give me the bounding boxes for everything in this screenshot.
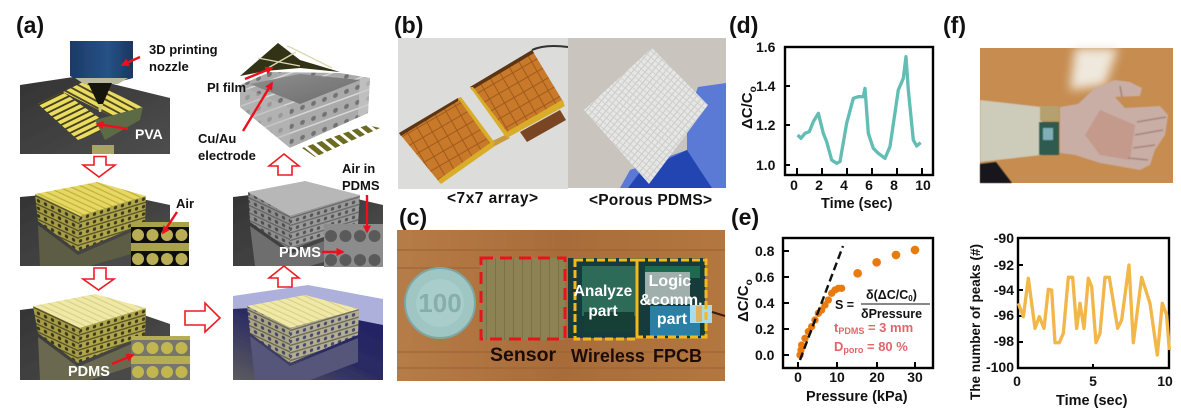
annotations: Air bbox=[176, 196, 194, 211]
panel c: wireless device bbox=[397, 204, 725, 381]
scene: assembled sensor with electrodes bbox=[240, 43, 380, 157]
x tick labels: 6 bbox=[865, 177, 873, 193]
x tick labels bbox=[790, 177, 931, 193]
annotations: PVA bbox=[135, 126, 163, 142]
y tick labels bbox=[755, 243, 775, 363]
x tick labels bbox=[794, 369, 923, 385]
thickness and porosity note: poro bbox=[843, 345, 864, 355]
scene: porous PDMS stack bbox=[233, 181, 383, 267]
x tick labels: 5 bbox=[1089, 373, 1097, 389]
scene: PDMS infiltrated scaffold bbox=[20, 294, 190, 380]
y tick labels: 1.6 bbox=[756, 39, 776, 55]
scene: stacked PVA scaffold bbox=[20, 182, 189, 266]
ticks bbox=[783, 251, 915, 368]
y axis title: o bbox=[744, 279, 755, 285]
x axis title: Time (sec) bbox=[1056, 393, 1128, 409]
y tick labels: 0.6 bbox=[755, 269, 775, 285]
label (d): (d) bbox=[729, 12, 758, 38]
label (f): (f) bbox=[943, 12, 966, 38]
sensitivity formula: S = bbox=[835, 298, 854, 312]
panel b: photographs bbox=[394, 12, 726, 209]
coin value: 100 bbox=[418, 288, 462, 318]
x tick labels: 0 bbox=[1013, 373, 1021, 389]
caption: porous PDMS: <Porous PDMS> bbox=[589, 192, 712, 209]
thickness and porosity note: PDMS bbox=[838, 326, 864, 336]
thickness and porosity note: D bbox=[834, 339, 843, 354]
panel e: pressure chart bbox=[731, 204, 933, 405]
y tick labels: 0.8 bbox=[755, 243, 775, 259]
annotations: nozzle bbox=[149, 59, 189, 74]
annotations: PI film bbox=[207, 80, 246, 95]
panel d: time response chart bbox=[729, 12, 933, 212]
annotations: electrode bbox=[198, 148, 256, 163]
ticks bbox=[1018, 265, 1093, 368]
axes frame bbox=[783, 238, 933, 368]
labels on device: FPCB bbox=[653, 346, 702, 366]
x tick labels: 8 bbox=[890, 177, 898, 193]
y tick labels bbox=[986, 230, 1014, 375]
scatter points bbox=[796, 246, 919, 359]
orange-yellow curve bbox=[1018, 265, 1169, 355]
y tick labels: 0.0 bbox=[755, 347, 775, 363]
sensitivity formula: ) bbox=[913, 288, 917, 302]
y tick labels: -90 bbox=[994, 230, 1014, 246]
ticks bbox=[785, 86, 922, 175]
y axis title: o bbox=[748, 86, 759, 92]
y tick labels: 1.0 bbox=[756, 157, 776, 173]
labels on device: Logic bbox=[649, 273, 691, 290]
labels on device bbox=[490, 273, 703, 366]
labels on device: part bbox=[657, 311, 688, 328]
labels on device: Analyze bbox=[574, 283, 633, 300]
y tick labels: 1.2 bbox=[756, 117, 776, 133]
y tick labels: -100 bbox=[986, 359, 1014, 375]
label (a): (a) bbox=[16, 12, 44, 38]
x tick labels: 30 bbox=[907, 369, 923, 385]
y axis title: ΔC/C bbox=[739, 92, 756, 129]
x tick labels: 0 bbox=[794, 369, 802, 385]
y tick labels bbox=[756, 39, 776, 173]
labels on device: part bbox=[588, 303, 618, 320]
panel f: wearable demo bbox=[943, 12, 1173, 409]
scene: PVA dissolving in blue bath bbox=[233, 285, 383, 380]
thickness and porosity note bbox=[834, 320, 913, 355]
photo: 7x7 array bbox=[398, 38, 568, 189]
x tick labels: 20 bbox=[869, 369, 885, 385]
label (c): (c) bbox=[399, 204, 427, 230]
x tick labels bbox=[1013, 373, 1173, 389]
y axis title: ΔC/C bbox=[735, 285, 752, 322]
annotations: Air in bbox=[342, 161, 375, 176]
axes frame bbox=[1018, 238, 1169, 368]
axes frame bbox=[785, 47, 933, 175]
x tick labels: 10 bbox=[915, 177, 931, 193]
red pointer arrows bbox=[97, 57, 367, 364]
y tick labels: 0.4 bbox=[755, 295, 775, 311]
annotations: PDMS bbox=[68, 364, 110, 380]
photo: porous PDMS bbox=[568, 38, 726, 188]
block arrows between steps bbox=[83, 154, 299, 332]
label (b): (b) bbox=[394, 12, 423, 38]
y tick labels: -92 bbox=[994, 257, 1014, 273]
annotations: 3D printing bbox=[149, 42, 218, 57]
sensitivity formula bbox=[835, 288, 930, 321]
y tick labels: 0.2 bbox=[755, 321, 775, 337]
sensitivity formula: δPressure bbox=[861, 307, 922, 321]
caption: 7x7 array: <7x7 array> bbox=[447, 190, 538, 207]
annotations bbox=[68, 42, 380, 380]
sensitivity formula: δ(ΔC/C bbox=[866, 288, 908, 302]
y tick labels: -96 bbox=[994, 307, 1014, 323]
x tick labels: 2 bbox=[815, 177, 823, 193]
annotations: Cu/Au bbox=[198, 131, 236, 146]
x tick labels: 10 bbox=[1157, 373, 1173, 389]
y axis title: The number of peaks (#) bbox=[968, 244, 983, 400]
photo: wrist sensor bbox=[980, 48, 1173, 183]
x axis title: Pressure (kPa) bbox=[806, 389, 908, 405]
y tick labels: -98 bbox=[994, 333, 1014, 349]
labels on device: &comm. bbox=[639, 292, 703, 309]
annotations: PDMS bbox=[279, 245, 321, 261]
x tick labels: 0 bbox=[790, 177, 798, 193]
thickness and porosity note: = 3 mm bbox=[864, 320, 913, 335]
panel a: fabrication process bbox=[16, 12, 383, 380]
annotations: PDMS bbox=[342, 178, 380, 193]
photo: device on wood bbox=[397, 230, 725, 381]
label (e): (e) bbox=[731, 204, 759, 230]
teal curve bbox=[798, 57, 921, 163]
y tick labels: 1.4 bbox=[756, 78, 776, 94]
sensitivity formula: 0 bbox=[908, 294, 913, 303]
y tick labels: -94 bbox=[994, 282, 1014, 298]
thickness and porosity note: = 80 % bbox=[863, 339, 908, 354]
dashed outlines bbox=[481, 258, 706, 339]
x tick labels: 4 bbox=[840, 177, 848, 193]
x axis title: Time (sec) bbox=[821, 196, 893, 212]
labels on device: Wireless bbox=[571, 346, 645, 366]
dashed fit line bbox=[800, 246, 843, 360]
labels on device: Sensor bbox=[490, 344, 557, 366]
scene: 3D printing PVA scaffold bbox=[20, 41, 170, 154]
x tick labels: 10 bbox=[829, 369, 845, 385]
thickness and porosity note: t bbox=[834, 320, 838, 335]
